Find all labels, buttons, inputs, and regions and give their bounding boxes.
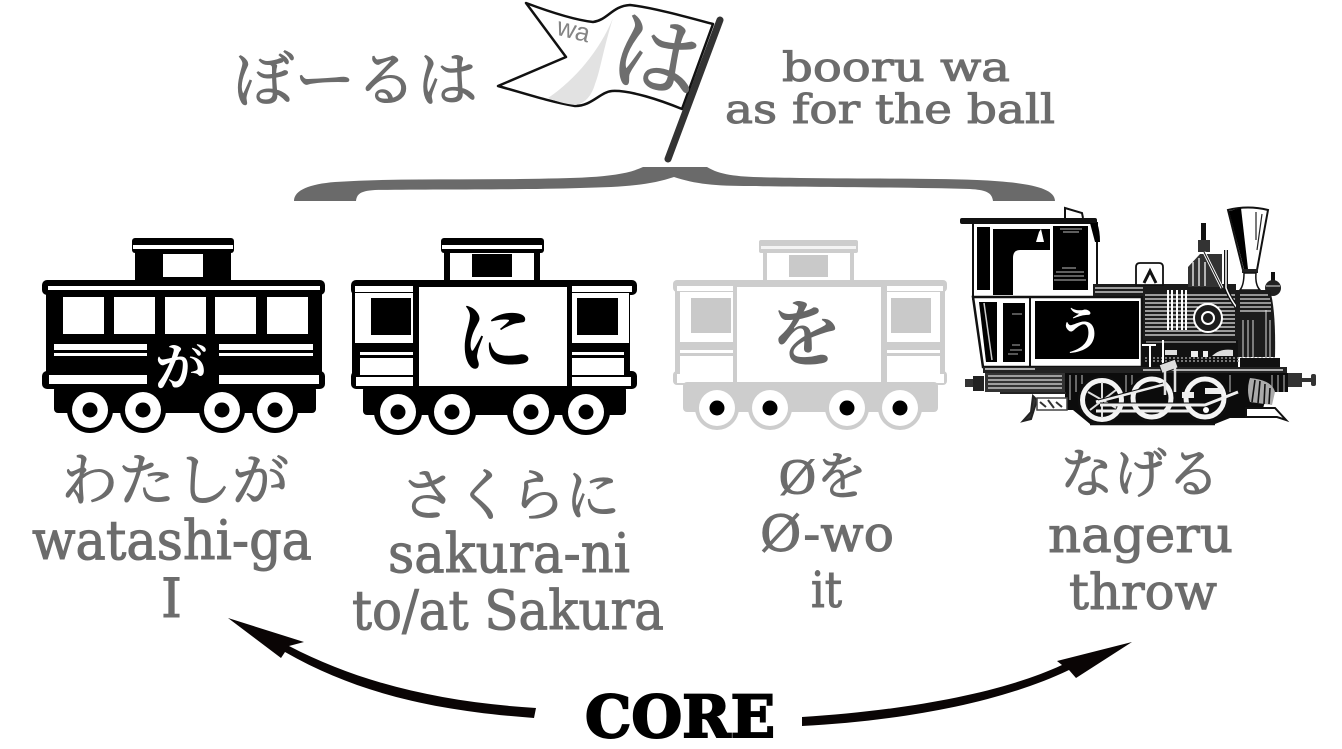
- train car: ni: に: [456, 295, 534, 382]
- romaji: booru wa: booru wa: [782, 45, 1010, 91]
- label: zero-wo: [760, 450, 894, 619]
- locomotive tender panel: [973, 297, 1142, 367]
- icon: wa flag: は: [602, 2, 710, 116]
- label: watashi-ga: watashi-ga: [32, 509, 312, 572]
- steam locomotive: u: [960, 208, 1316, 424]
- icon: wa flag: wa: [553, 11, 594, 48]
- locomotive cab: [960, 208, 1100, 299]
- locomotive chimney: [1228, 208, 1281, 296]
- train car: wo (faded): [673, 240, 947, 430]
- translation: as for the ball: as for the ball: [725, 87, 1055, 133]
- label: sakura-ni: to/at Sakura: [352, 579, 664, 642]
- label: nageru: nageru: [1048, 506, 1233, 564]
- label: watashi-ga: I: [161, 567, 182, 630]
- label: nageru: なげる: [1060, 446, 1220, 504]
- topic heading: ball wa: ぼーるは: [233, 48, 478, 114]
- arrow: core to verb: [802, 642, 1132, 726]
- label: zero-wo: Ø-wo: [760, 505, 894, 563]
- label: sakura-ni: さくらに: [401, 465, 620, 528]
- label: watashi-ga: わたしが: [61, 450, 289, 513]
- label: zero-wo: it: [811, 561, 842, 619]
- label: nageru: [1048, 446, 1233, 621]
- label: zero-wo: Øを: [779, 450, 867, 506]
- curly brace: [294, 167, 1055, 201]
- arrow: core to subject: [228, 618, 536, 718]
- train car: ga: が: [155, 341, 207, 398]
- icon: wa flag: [498, 2, 720, 159]
- locomotive smokebox and frame: [965, 290, 1316, 424]
- locomotive tender panel: う: [1056, 304, 1106, 360]
- locomotive wheels and cowcatcher: [1078, 359, 1286, 424]
- core label: CORE: [585, 683, 775, 749]
- label: watashi-ga: [32, 450, 312, 630]
- train car: ni: [351, 238, 637, 435]
- locomotive boiler and dome: [1093, 223, 1250, 340]
- train car: ga: [42, 238, 325, 433]
- label: sakura-ni: [352, 465, 664, 642]
- train car: wo (faded): を: [770, 296, 842, 376]
- label: sakura-ni: sakura-ni: [388, 522, 630, 585]
- label: nageru: throw: [1069, 563, 1217, 621]
